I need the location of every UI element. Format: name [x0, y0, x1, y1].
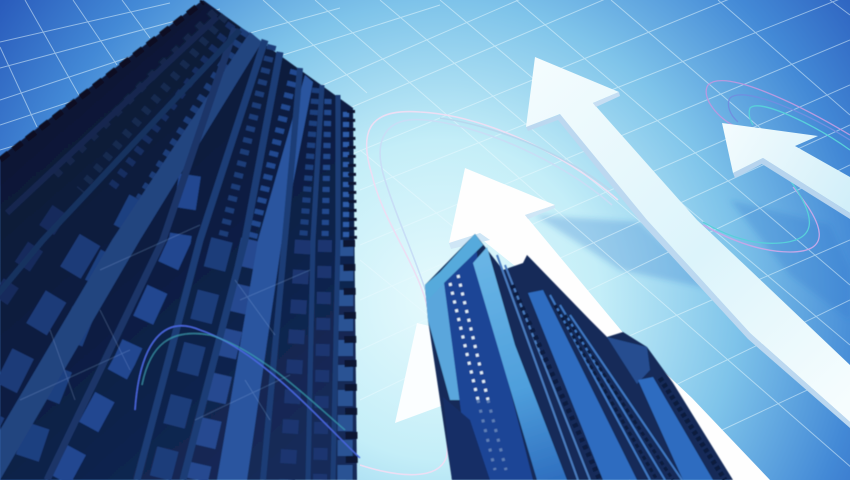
arrow: large right [526, 57, 850, 428]
faint grid reflection [20, 225, 310, 420]
light band two [528, 290, 637, 480]
big orbit ring [360, 112, 618, 475]
structural pillars [0, 17, 338, 480]
light band three [638, 377, 713, 480]
roof light [425, 234, 483, 300]
building: right tower [425, 234, 733, 480]
window dots [450, 275, 506, 470]
arrow: centre [449, 168, 770, 480]
light band one [473, 247, 567, 480]
stripe lines [550, 295, 682, 480]
glow rings on tower [135, 326, 360, 458]
right orbit rings [703, 81, 850, 252]
far right windows [660, 378, 725, 480]
dark left face [443, 234, 533, 480]
lower left shadow [443, 397, 490, 480]
top dark face [607, 337, 650, 384]
building: left tower [0, 0, 360, 480]
light left strip [425, 275, 466, 400]
right edge floor tabs [351, 110, 353, 240]
window columns [0, 12, 346, 480]
light vertical bands [0, 32, 262, 480]
tower body [0, 0, 357, 480]
arrow: upper right [722, 123, 850, 219]
stepped roof edge [0, 2, 203, 160]
arrow shadows on sky [535, 200, 850, 320]
arrow: lower left [395, 323, 452, 423]
window stripes [497, 255, 590, 480]
tower body [425, 234, 733, 480]
